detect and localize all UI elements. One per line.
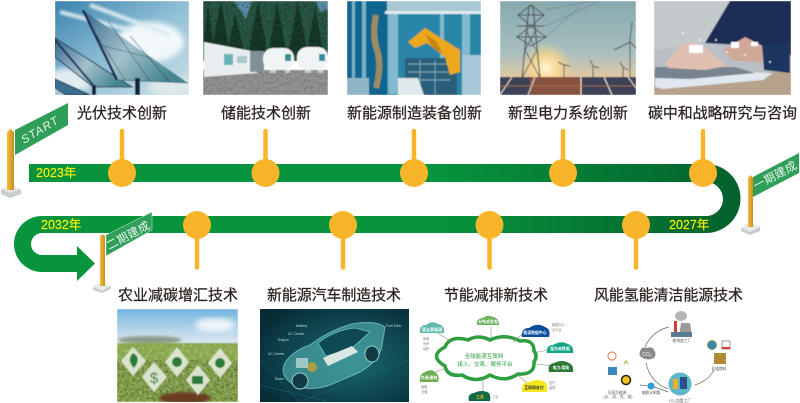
cloud title: 全球能源互联网 — [465, 352, 504, 360]
title: 碳中和战略研究与咨询: 碳中和战略研究与咨询 — [648, 105, 797, 122]
title: 风能氢能清洁能源技术: 风能氢能清洁能源技术 — [594, 287, 743, 304]
title: 光伏技术创新: 光伏技术创新 — [77, 105, 167, 122]
diagram: energy internet cloud: 数据中心 — [552, 322, 566, 327]
photo: power tower and solar — [500, 1, 640, 95]
year: 2027年: 2027年 — [669, 218, 709, 232]
diagram: energy internet cloud: 工业 — [476, 394, 484, 399]
photo: new energy vehicle: Fuel Tank — [386, 324, 401, 328]
title: 储能技术创新: 储能技术创新 — [221, 105, 311, 122]
photo: new energy vehicle: AC Center — [268, 352, 285, 356]
label: hydrogen: 电解水制氢 — [642, 390, 661, 395]
icon text: dollar: $ — [150, 370, 159, 387]
CO2 cloud — [639, 347, 656, 360]
node: 工业 — [469, 391, 490, 401]
factory circle — [668, 372, 692, 396]
main cloud — [436, 337, 536, 380]
title: 新能源制造装备创新: 新能源制造装备创新 — [347, 105, 482, 122]
node: 能源数据中心 — [522, 325, 550, 337]
cloud subtitle: 接入、交易、服务平台 — [457, 360, 513, 368]
timeline road — [14, 164, 740, 281]
node: 交通 — [420, 370, 439, 382]
diagram: energy internet cloud: 交通 — [421, 389, 428, 394]
photo: new energy vehicle — [260, 309, 409, 402]
title: 新能源汽车制造技术: 新能源汽车制造技术 — [267, 287, 401, 304]
diagram: energy internet cloud: 服务商数据 — [550, 346, 570, 351]
diagram: energy internet cloud: 云平台 — [552, 327, 562, 332]
node: 服务商 — [547, 342, 573, 353]
diagram: energy internet cloud — [420, 316, 573, 401]
node: 分布式发电 — [477, 316, 499, 325]
diagram: energy internet cloud: 建筑 — [421, 384, 428, 389]
label: products: 长链燃料 — [711, 366, 727, 371]
title: 农业减碳增汇技术: 农业减碳增汇技术 — [118, 287, 238, 304]
photo: new energy vehicle: Motor — [275, 377, 285, 381]
milestones upper row — [108, 131, 717, 187]
photo: laptop consulting — [654, 1, 791, 95]
node: 电力 — [549, 361, 573, 372]
photo: new energy vehicle: Battery — [296, 324, 307, 328]
sign: 二期建成 — [93, 212, 152, 293]
sign: 一期建成: 一期建成 — [751, 158, 799, 193]
photo: solar panels — [46, 1, 192, 95]
label: renewable: 可再生能源 — [608, 390, 627, 395]
sign: START — [1, 103, 68, 198]
renewable icons — [608, 352, 616, 360]
title: 新型电力系统创新: 新型电力系统创新 — [508, 105, 628, 122]
label: source: (水、风、光、核) — [603, 394, 633, 399]
diagram: CO2 cycle — [603, 311, 730, 403]
label: factory: CO₂加氢工厂 — [669, 398, 691, 403]
photo: robot arm factory — [347, 1, 481, 95]
photo: agriculture field with icons — [117, 309, 238, 403]
sign: 一期建成 — [741, 153, 799, 235]
photo: new energy vehicle: DC Center — [288, 332, 305, 336]
diagram: energy internet cloud: 工业 — [492, 394, 498, 399]
diagram: energy internet cloud: 结算 — [549, 385, 556, 390]
diagram: energy internet cloud: 地热 — [423, 346, 430, 351]
photo: new energy vehicle: Engine — [278, 338, 289, 342]
diagram: energy internet cloud: 互联网支付 — [524, 385, 544, 390]
sign: 二期建成: 二期建成 — [104, 218, 152, 253]
diagram: energy internet cloud: 清洁/新能源 — [422, 327, 442, 332]
year: 2032年: 2032年 — [41, 218, 81, 232]
label: plant: 碳排放工厂 — [673, 338, 692, 343]
diagram: energy internet cloud: 电力/用能 — [553, 365, 569, 370]
diagram: energy internet cloud: 分布式发电 — [478, 319, 498, 324]
diagram: CO2 cycle: CO₂ — [642, 352, 652, 358]
diagram: energy internet cloud: 支付 — [549, 380, 556, 385]
diagram: energy internet cloud: 光伏 — [423, 341, 430, 346]
node: 清洁能源 — [420, 322, 444, 333]
diagram: energy internet cloud: 风电 — [423, 336, 430, 341]
sign: START: START — [19, 115, 62, 147]
plant — [671, 311, 692, 337]
title: 节能减排新技术: 节能减排新技术 — [444, 287, 548, 304]
diagram: energy internet cloud: 交通/建筑 — [421, 375, 437, 380]
node: 互联网 — [522, 380, 547, 392]
milestones lower row — [183, 211, 650, 268]
products — [708, 340, 716, 350]
diagram: energy internet cloud: 能源数据中心 — [523, 330, 547, 335]
year: 2023年: 2023年 — [36, 166, 76, 180]
photo: hydrogen storage — [203, 1, 328, 95]
